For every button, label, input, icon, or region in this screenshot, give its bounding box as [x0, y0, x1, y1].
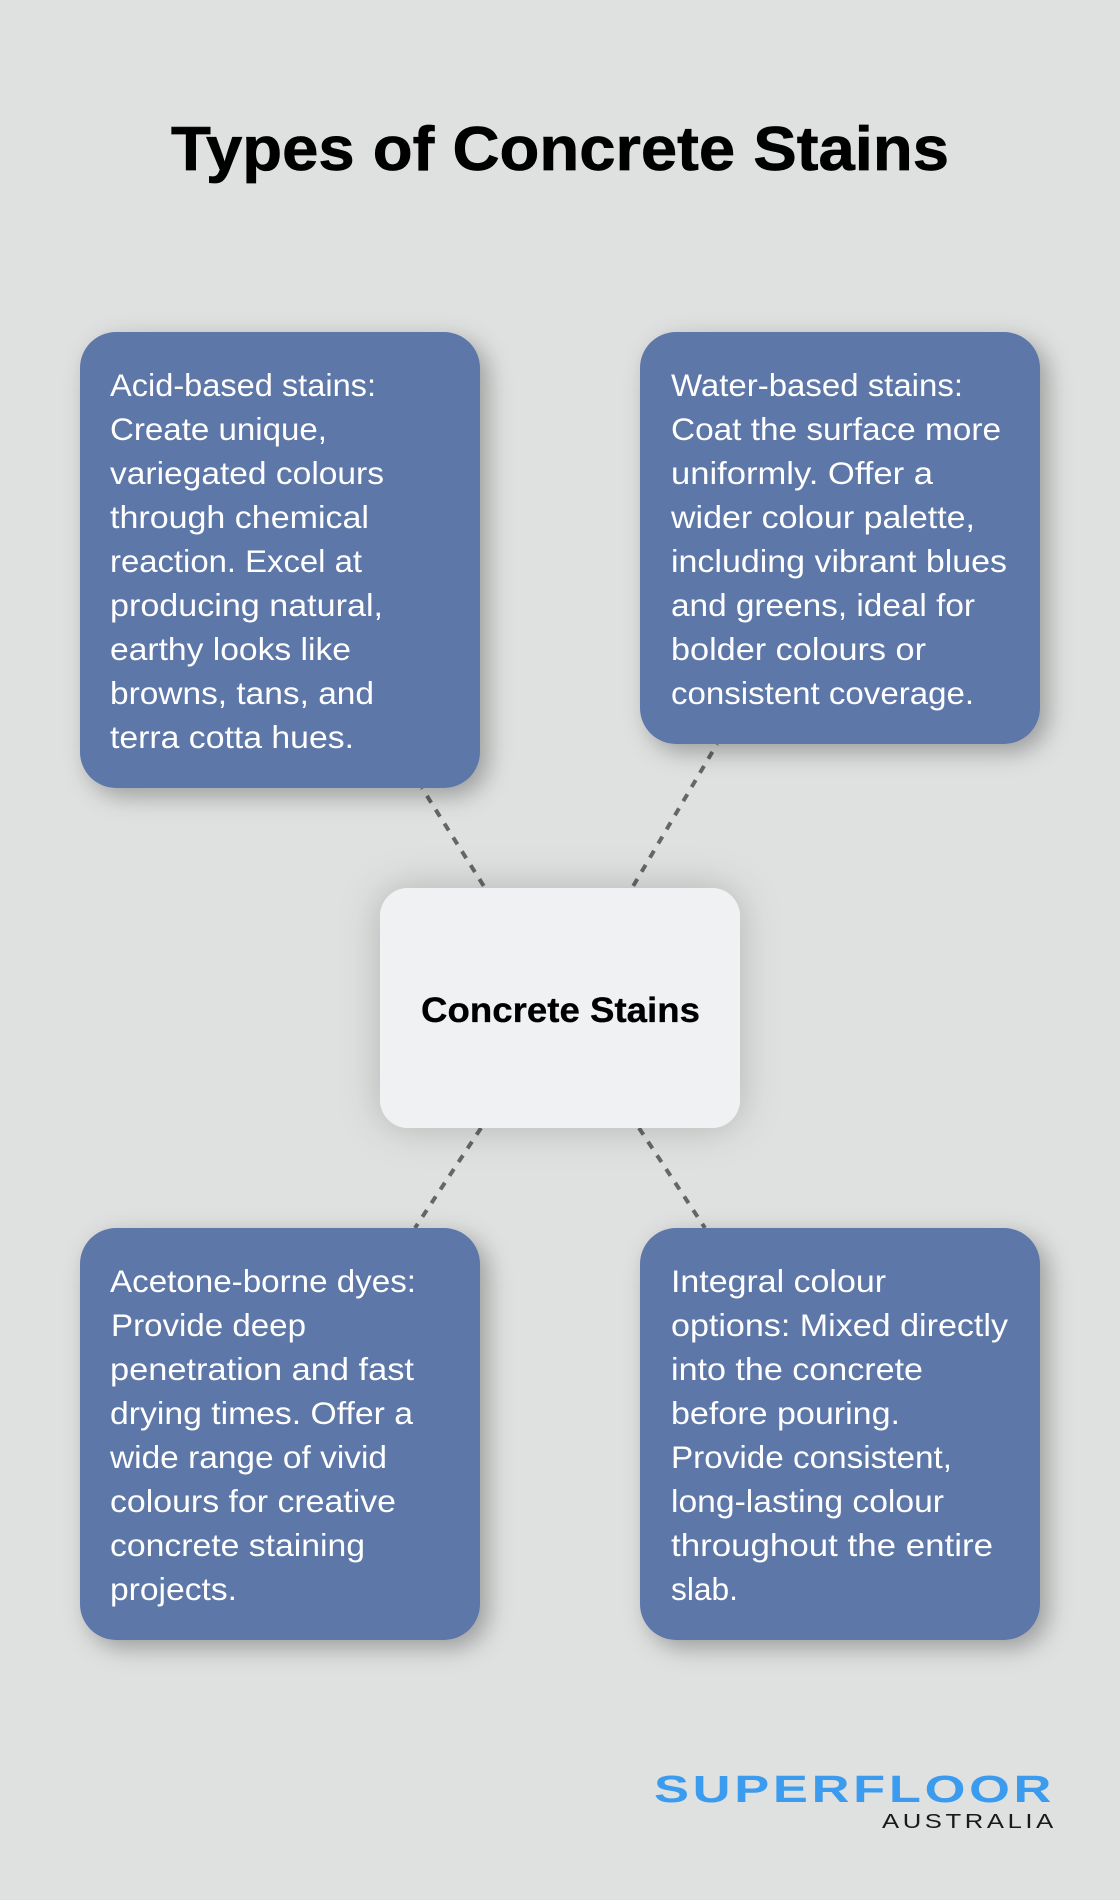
text: integral colour options description — [671, 1263, 1008, 1607]
text: water-based stains description: uniformly. Offer a — [671, 455, 934, 491]
text: water-based stains description: Water-based stains: — [671, 367, 963, 403]
panel: integral colour options — [640, 1228, 1040, 1640]
text: water-based stains description — [670, 367, 1007, 711]
text: integral colour options description: into the concrete — [671, 1351, 923, 1387]
logo: Superfloor Australia — [654, 1768, 1054, 1832]
text: integral colour options description: options: Mixed directly — [671, 1307, 1008, 1343]
text: integral colour options description: slab. — [671, 1571, 738, 1607]
logo subline: AUSTRALIA — [882, 1809, 1054, 1832]
text: integral colour options description: long-lasting colour — [671, 1483, 944, 1519]
logo: Superfloor Australia: SUPERFLOOR — [654, 1768, 1051, 1810]
text: water-based stains description: bolder colours or — [671, 631, 926, 667]
text: integral colour options description: Provide consistent, — [671, 1439, 952, 1475]
text: acetone-borne dyes description: Acetone-borne dyes: — [110, 1263, 416, 1299]
panel: central node — [380, 888, 740, 1128]
text: acid-based stains description: reaction. Excel at — [110, 543, 362, 579]
text: water-based stains description: Coat the surface more — [671, 411, 1001, 447]
text: water-based stains description: including vibrant blues — [671, 543, 1007, 579]
text: acetone-borne dyes description: Provide deep — [111, 1307, 306, 1343]
text: acetone-borne dyes description: drying times. Offer a — [110, 1395, 414, 1431]
text: water-based stains description: consistent coverage. — [671, 675, 974, 711]
text: acetone-borne dyes description: colours for creative — [110, 1483, 396, 1519]
text: acid-based stains description: Acid-based stains: — [110, 367, 376, 403]
text: acid-based stains description: through chemical — [110, 499, 369, 535]
text: acetone-borne dyes description: wide range of vivid — [109, 1439, 387, 1475]
text: acid-based stains description: terra cotta hues. — [110, 719, 354, 755]
connector: centre to water-based stains — [632, 744, 717, 888]
text: acid-based stains description: Create unique, — [110, 411, 327, 447]
text: acid-based stains description: earthy looks like — [110, 631, 351, 667]
text: acid-based stains description: browns, tans, and — [110, 675, 374, 711]
text: integral colour options description: throughout the entire — [671, 1527, 993, 1563]
connector: centre to acetone-borne dyes — [415, 1128, 481, 1228]
connector: centre to integral colour options — [639, 1128, 705, 1228]
text: water-based stains description: wider colour palette, — [670, 499, 975, 535]
text: integral colour options description: before pouring. — [671, 1395, 900, 1431]
connector: centre to acid-based stains — [422, 788, 485, 888]
panel: water-based stains — [640, 332, 1040, 744]
text: acetone-borne dyes description: penetration and fast — [110, 1351, 414, 1387]
text: acetone-borne dyes description — [109, 1263, 416, 1607]
text: acetone-borne dyes description: concrete staining — [110, 1527, 365, 1563]
text: water-based stains description: and greens, ideal for — [671, 587, 975, 623]
text: acetone-borne dyes description: projects. — [110, 1571, 237, 1607]
text: acid-based stains description: variegated colours — [110, 455, 384, 491]
panel: acetone-borne dyes — [80, 1228, 480, 1640]
text: acid-based stains description — [110, 367, 384, 755]
title: Types of Concrete Stains — [171, 115, 949, 184]
text: integral colour options description: Integral colour — [671, 1263, 886, 1299]
text: acid-based stains description: producing natural, — [110, 587, 383, 623]
panel: acid-based stains — [80, 332, 480, 788]
central label: Concrete Stains — [421, 991, 700, 1030]
